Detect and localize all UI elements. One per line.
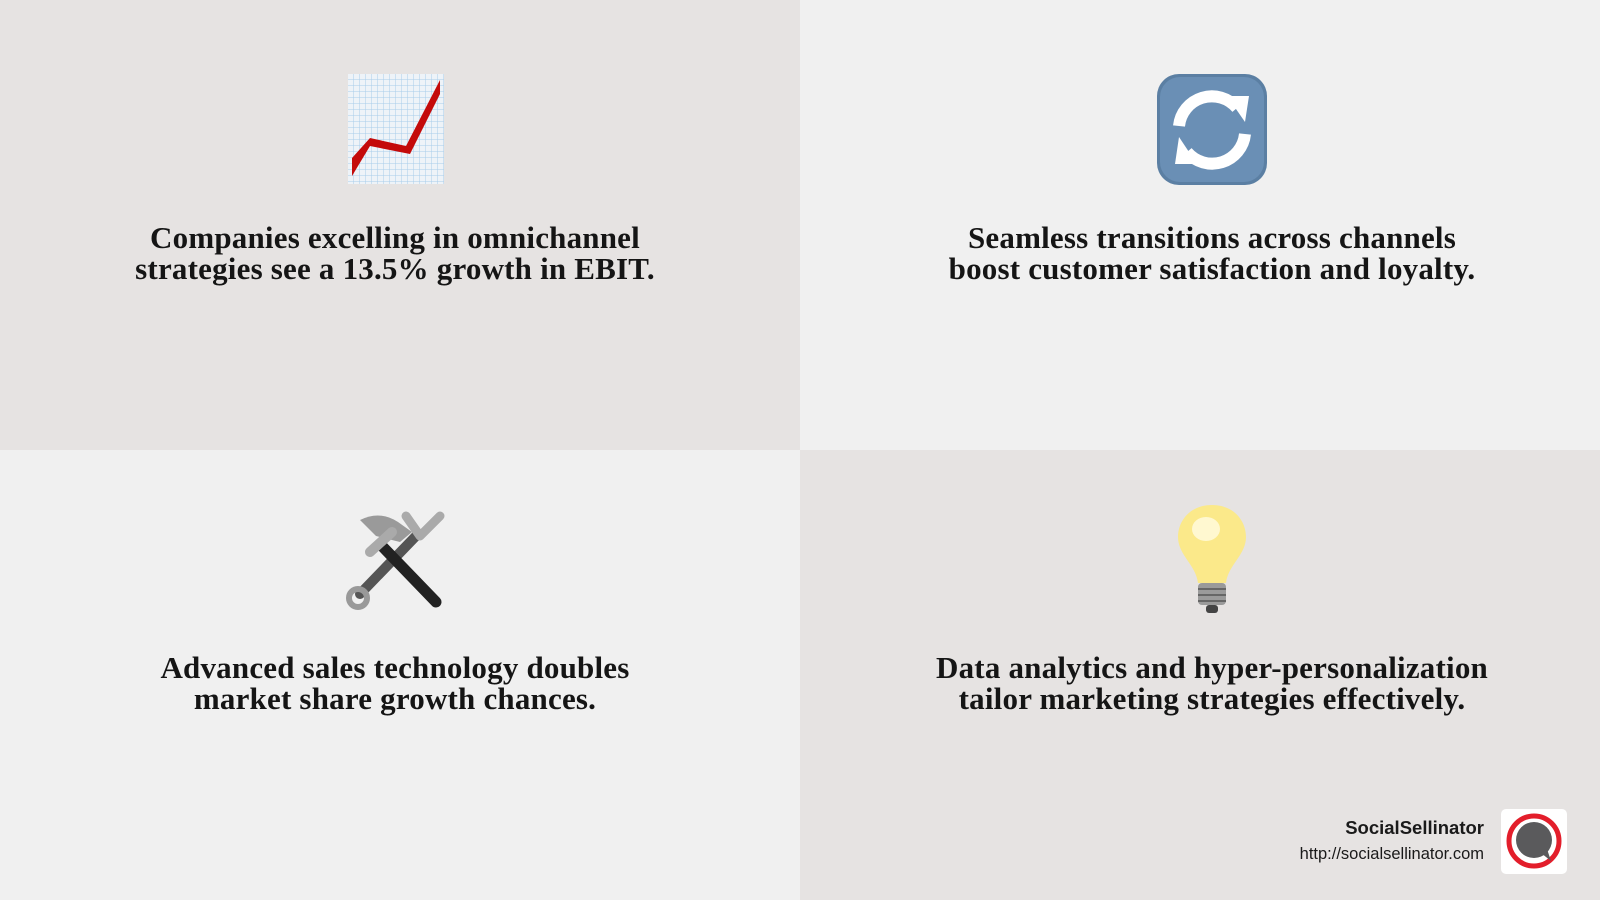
text: bottom-right [936, 650, 1488, 716]
text: top-right [949, 220, 1475, 286]
brand text: http://socialsellinator.com [1300, 845, 1484, 863]
text: top-left: Companies excelling in omnichannel [150, 220, 640, 255]
text: bottom-right: Data analytics and hyper-personalization [936, 650, 1488, 685]
panel: top-left [0, 0, 800, 450]
icon: light bulb [1178, 505, 1246, 613]
icon: hammer and wrench [346, 512, 444, 610]
text: top-right: boost customer satisfaction and loyalty. [949, 250, 1475, 286]
text: top-left: strategies see a 13.5% growth in EBIT. [135, 250, 655, 286]
text: bottom-right: tailor marketing strategies effectively. [959, 680, 1465, 716]
brand text [1300, 817, 1484, 863]
text: top-right: Seamless transitions across channels [968, 220, 1456, 255]
text: bottom-left [160, 650, 630, 716]
logo [1501, 809, 1567, 874]
brand text: SocialSellinator [1345, 817, 1484, 838]
panel: bottom-right [800, 450, 1600, 900]
text: bottom-left: Advanced sales technology doubles [160, 650, 630, 685]
icon: chart increasing [348, 74, 444, 184]
text: bottom-left: market share growth chances. [194, 680, 596, 716]
text: top-left [135, 220, 655, 286]
icon: refresh arrows [1157, 74, 1267, 185]
panel: top-right [800, 0, 1600, 450]
panel: bottom-left [0, 450, 800, 900]
